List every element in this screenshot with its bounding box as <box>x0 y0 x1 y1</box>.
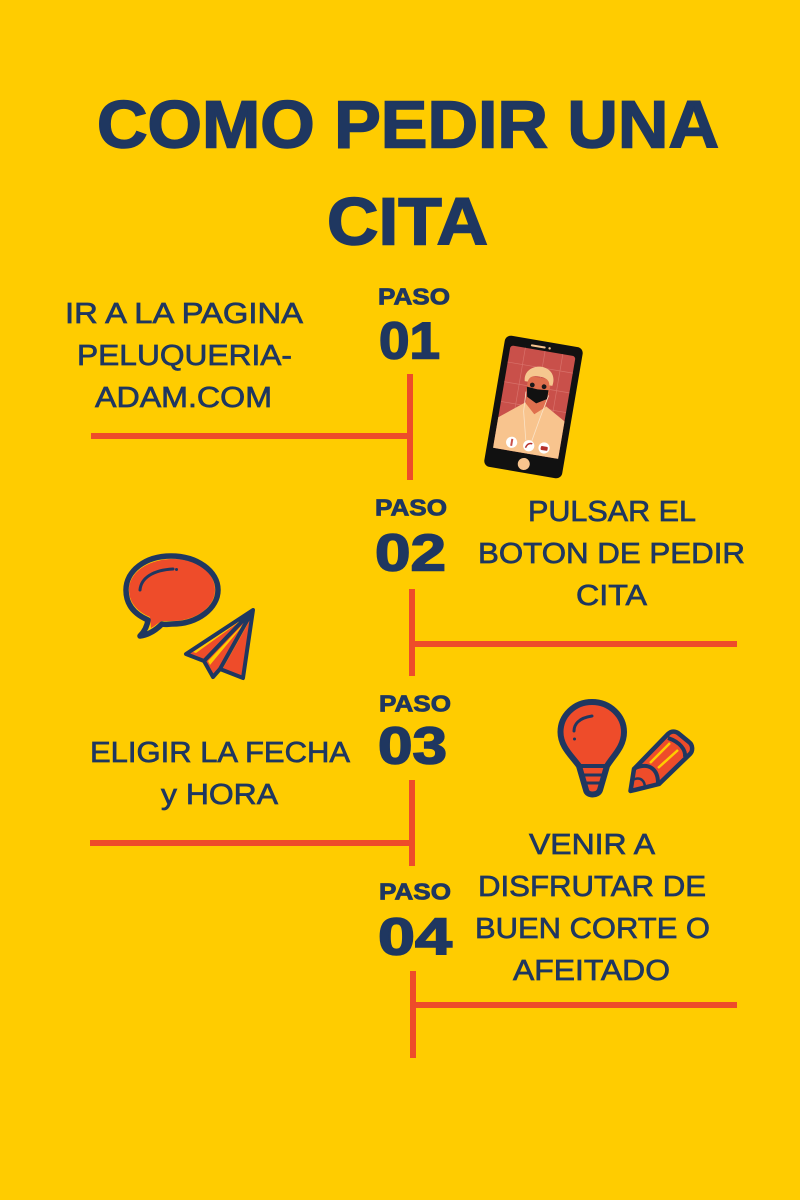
step 3 label: PASO <box>379 690 451 716</box>
step 4 text <box>475 829 710 987</box>
step 2 text: BOTON DE PEDIR <box>478 538 745 570</box>
step 1 text: IR A LA PAGINA <box>65 298 304 330</box>
step 2 label <box>375 494 447 582</box>
step 1 label: 01 <box>379 312 440 370</box>
step 3 text: ELIGIR LA FECHA <box>90 737 351 769</box>
step 3 label <box>378 690 451 776</box>
step 4 label: PASO <box>379 878 451 904</box>
step 2 text: PULSAR EL <box>528 496 696 528</box>
step 3 text <box>90 737 351 811</box>
step 1 connector lines <box>91 374 413 480</box>
step 4 text: BUEN CORTE O <box>475 913 710 945</box>
step 4 connector lines <box>410 971 737 1058</box>
step 4 label <box>378 878 452 966</box>
step 3 text: y HORA <box>161 779 279 811</box>
icon: light bulb <box>560 702 624 794</box>
title: CITA <box>327 184 488 260</box>
icon: phone with video call <box>483 335 584 479</box>
step 2 text: CITA <box>576 580 648 612</box>
step 2 label: PASO <box>375 494 447 520</box>
step 4 text: AFEITADO <box>513 955 670 987</box>
icon: pencil <box>630 732 692 791</box>
step 1 text: ADAM.COM <box>95 382 272 414</box>
step 3 label: 03 <box>378 718 447 776</box>
title: COMO PEDIR UNA <box>97 88 719 162</box>
step 1 text <box>65 298 304 414</box>
icon: speech bubble <box>126 556 218 636</box>
step 2 connector lines <box>409 589 737 676</box>
step 4 text: DISFRUTAR DE <box>478 871 706 903</box>
step 1 label <box>378 284 450 370</box>
step 2 label: 02 <box>375 524 446 582</box>
step 1 label: PASO <box>378 284 450 310</box>
title <box>97 88 719 260</box>
step 4 label: 04 <box>378 908 452 966</box>
step 4 text: VENIR A <box>529 829 656 861</box>
step 1 text: PELUQUERIA- <box>77 340 292 372</box>
step 3 connector lines <box>90 780 415 866</box>
step 2 text <box>478 496 745 612</box>
icon: paper airplane <box>186 610 253 678</box>
